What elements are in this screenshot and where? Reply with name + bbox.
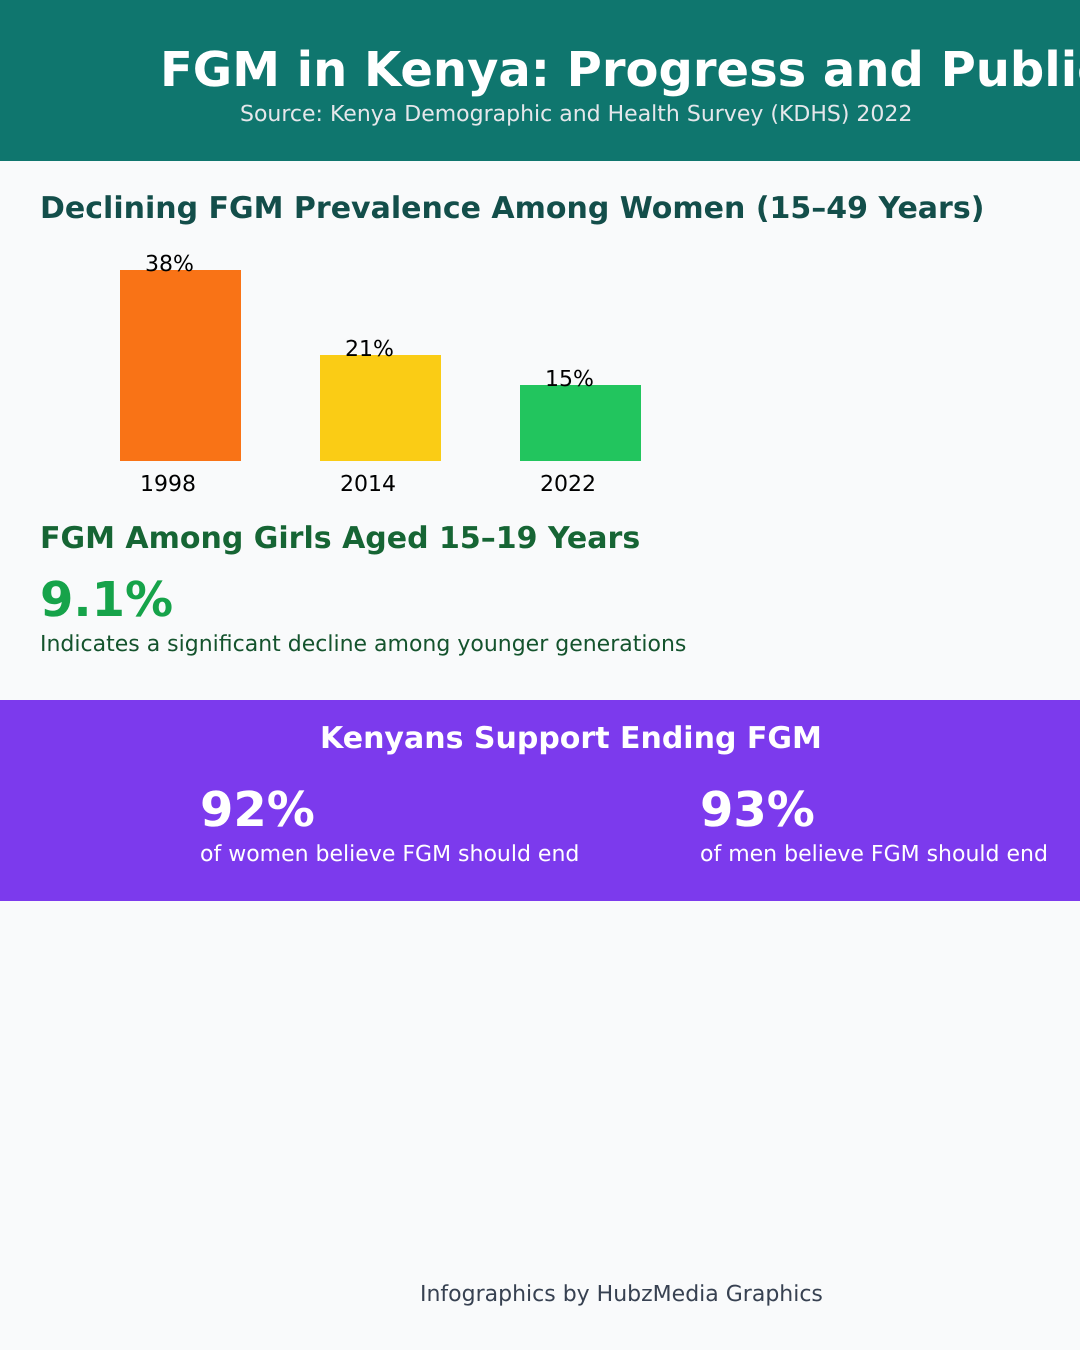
heading: declining prevalence: Declining FGM Prevalence Among Women (15–49 Years) (40, 191, 984, 226)
bar: 2014: 2014 (340, 472, 396, 497)
panel: public support (0, 700, 1080, 901)
statistic: women (200, 782, 579, 867)
statistic: men (700, 782, 1048, 867)
heading: girls aged 15-19: FGM Among Girls Aged 15–19 Years (40, 521, 640, 556)
panel heading: Kenyans Support Ending FGM (320, 721, 822, 756)
statistic note: Indicates a significant decline among younger generations (40, 632, 686, 657)
statistic: women: 92% (200, 782, 315, 838)
bar chart (120, 252, 641, 497)
bar: 2014 (320, 337, 441, 497)
bar: 1998: 1998 (140, 472, 196, 497)
header banner (0, 0, 1080, 161)
bar: 2022 (520, 367, 641, 497)
statistic: men: 93% (700, 782, 815, 838)
bar: 1998 (120, 252, 241, 497)
footer credit: Infographics by HubzMedia Graphics (420, 1282, 823, 1307)
bar: 2014: 21% (345, 337, 394, 362)
bar: 2022: 2022 (540, 472, 596, 497)
statistic: women: of women believe FGM should end (200, 842, 579, 867)
bar: 2022: 15% (545, 367, 594, 392)
statistic: men: of men believe FGM should end (700, 842, 1048, 867)
bar: 1998: 38% (145, 252, 194, 277)
statistic: 9.1%: 9.1% (40, 572, 173, 628)
source line: Source: Kenya Demographic and Health Survey (KDHS) 2022 (240, 102, 912, 127)
